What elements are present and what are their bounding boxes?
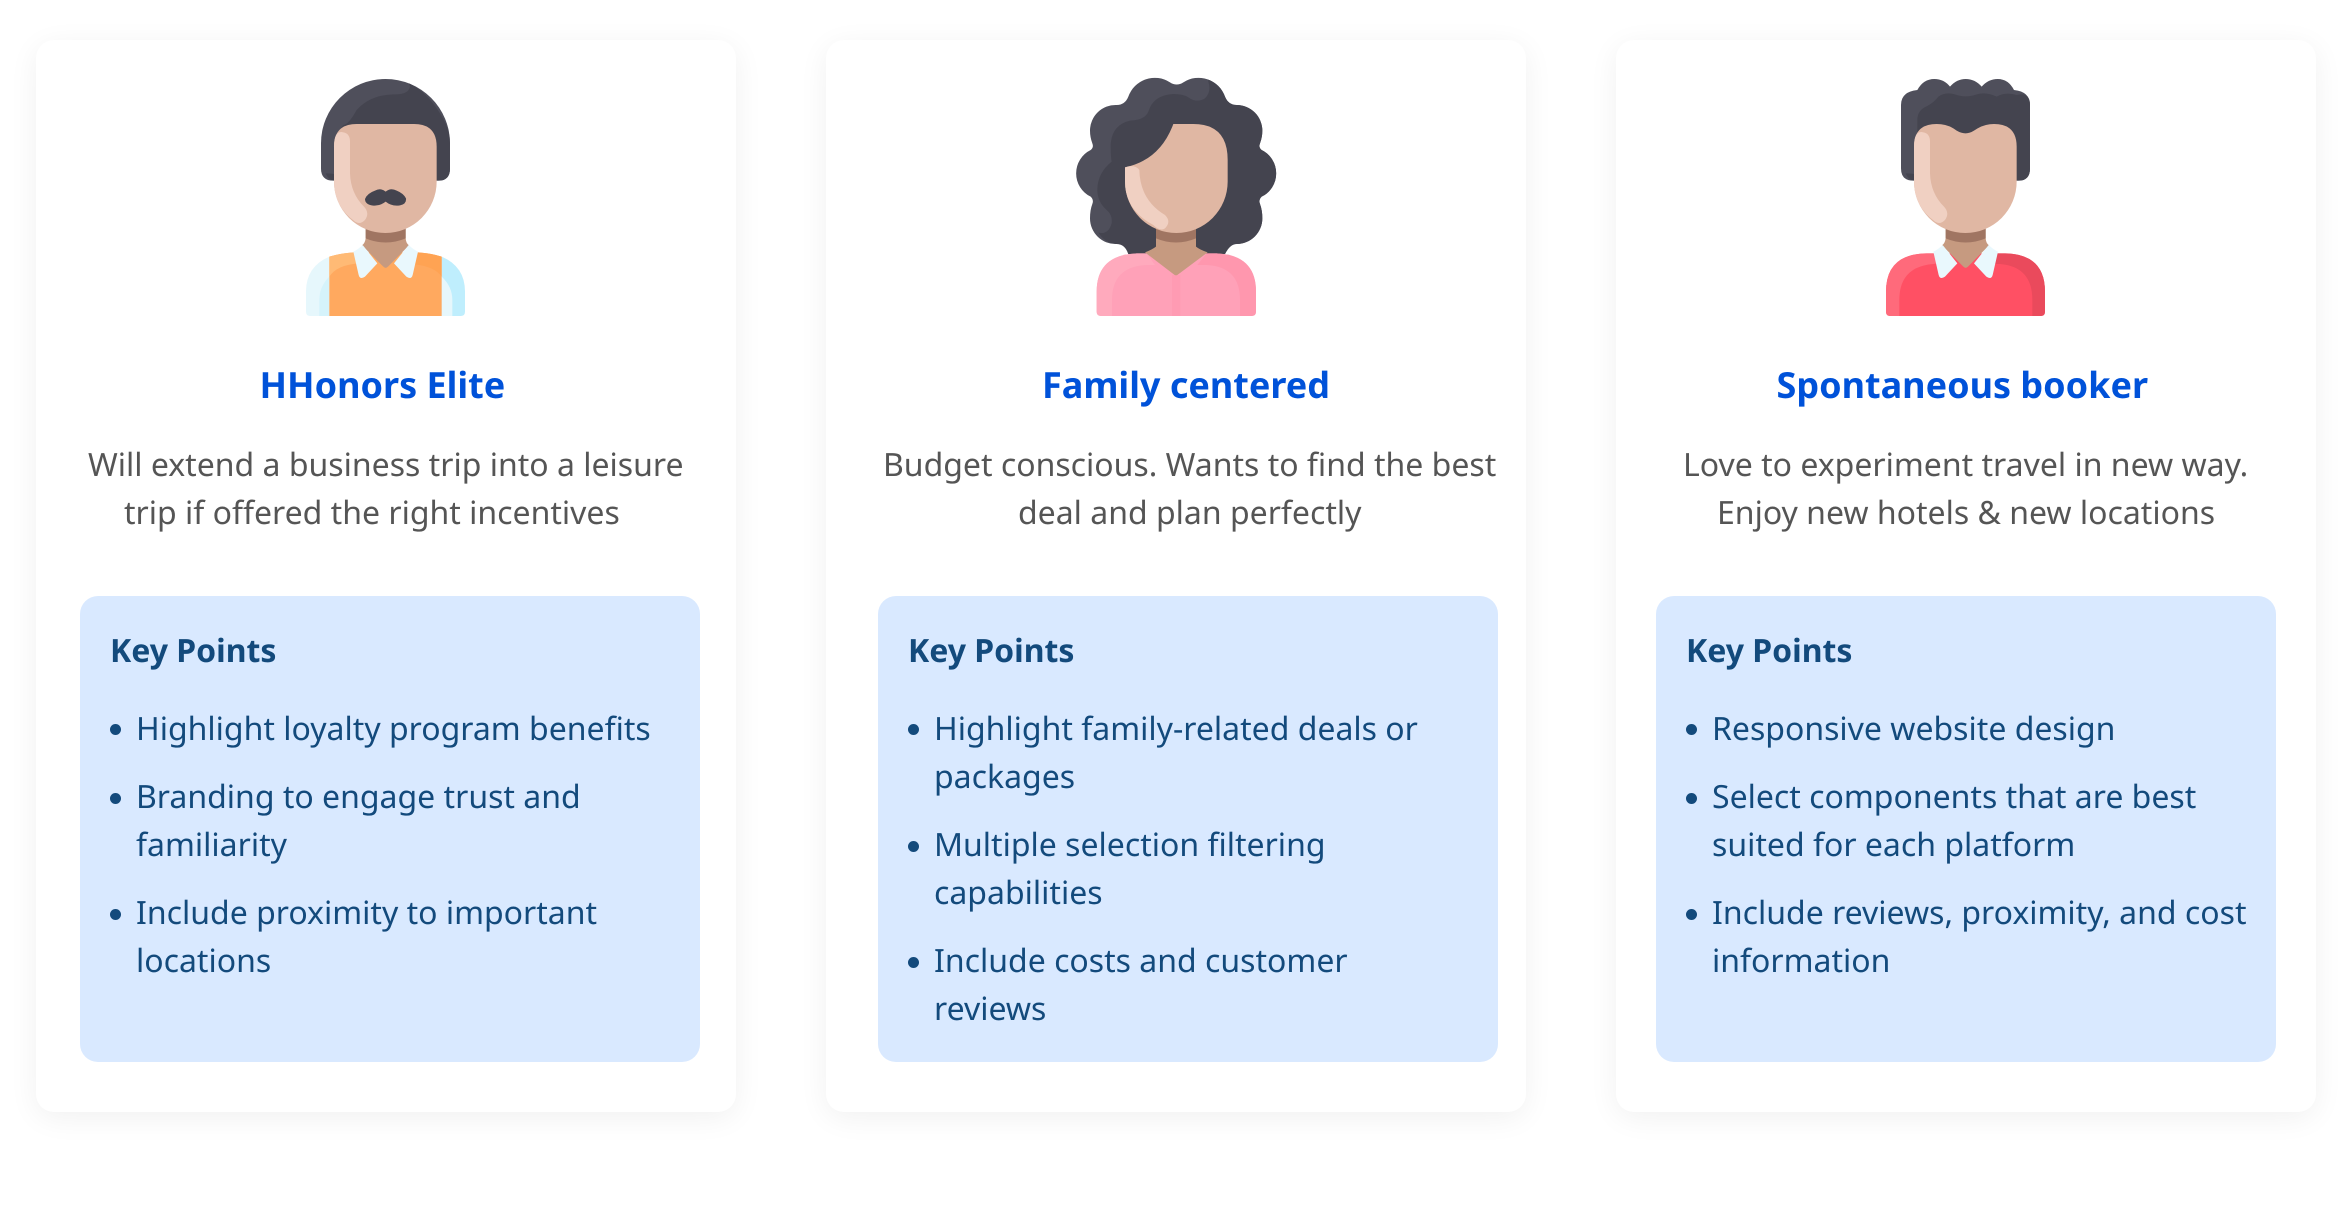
text: Enjoy new hotels & new locations bbox=[1717, 491, 2215, 534]
list: key points items: Highlight loyalty program benefits bbox=[136, 707, 651, 750]
text: Budget conscious. Wants to find the best bbox=[883, 443, 1496, 486]
list: key points items: Branding to engage trust and bbox=[136, 775, 581, 818]
heading: HHonors Elite: HHonors Elite bbox=[260, 360, 505, 409]
icon: man with short curly hair avatar bbox=[1886, 79, 2045, 316]
list: key points items: reviews bbox=[934, 987, 1046, 1030]
text: Will extend a business trip into a leisure bbox=[88, 443, 684, 486]
heading: key points: Key Points bbox=[1686, 629, 1852, 672]
list: key points items: familiarity bbox=[136, 823, 287, 866]
list: key points items: Include costs and customer bbox=[934, 939, 1348, 982]
panel: key points HHonors Elite bbox=[80, 596, 700, 1062]
list: key points items: Highlight family-related deals or bbox=[934, 707, 1418, 750]
heading: key points: Key Points bbox=[908, 629, 1074, 672]
text: deal and plan perfectly bbox=[1018, 491, 1361, 534]
panel: Spontaneous booker bbox=[1616, 40, 2316, 1112]
text: Love to experiment travel in new way. bbox=[1683, 443, 2248, 486]
icon: woman with curly hair avatar bbox=[1076, 78, 1276, 316]
list: key points items: Include proximity to important bbox=[136, 891, 597, 934]
panel: HHonors Elite bbox=[36, 40, 736, 1112]
panel: key points Family centered bbox=[878, 596, 1498, 1062]
list: key points items bbox=[908, 707, 1418, 1030]
icon: man with moustache avatar bbox=[306, 79, 465, 316]
heading: Spontaneous booker: Spontaneous booker bbox=[1776, 360, 2148, 409]
panel: key points Spontaneous booker bbox=[1656, 596, 2276, 1062]
list: key points items: packages bbox=[934, 755, 1075, 798]
list: key points items: information bbox=[1712, 939, 1890, 982]
list: key points items: Multiple selection filtering bbox=[934, 823, 1326, 866]
list: key points items: Responsive website design bbox=[1712, 707, 2115, 750]
list: key points items: locations bbox=[136, 939, 271, 982]
list: key points items: suited for each platform bbox=[1712, 823, 2075, 866]
text: trip if offered the right incentives bbox=[124, 491, 620, 534]
list: key points items bbox=[110, 707, 651, 982]
heading: Family centered: Family centered bbox=[1042, 360, 1330, 409]
list: key points items bbox=[1686, 707, 2246, 982]
list: key points items: Include reviews, proximity, and cost bbox=[1712, 891, 2246, 934]
panel: Family centered bbox=[826, 40, 1526, 1112]
list: key points items: Select components that are best bbox=[1712, 775, 2196, 818]
heading: key points: Key Points bbox=[110, 629, 276, 672]
text: Family centered description bbox=[883, 443, 1496, 534]
text: Spontaneous booker description bbox=[1683, 443, 2248, 534]
text: HHonors Elite description bbox=[88, 443, 684, 534]
list: key points items: capabilities bbox=[934, 871, 1103, 914]
